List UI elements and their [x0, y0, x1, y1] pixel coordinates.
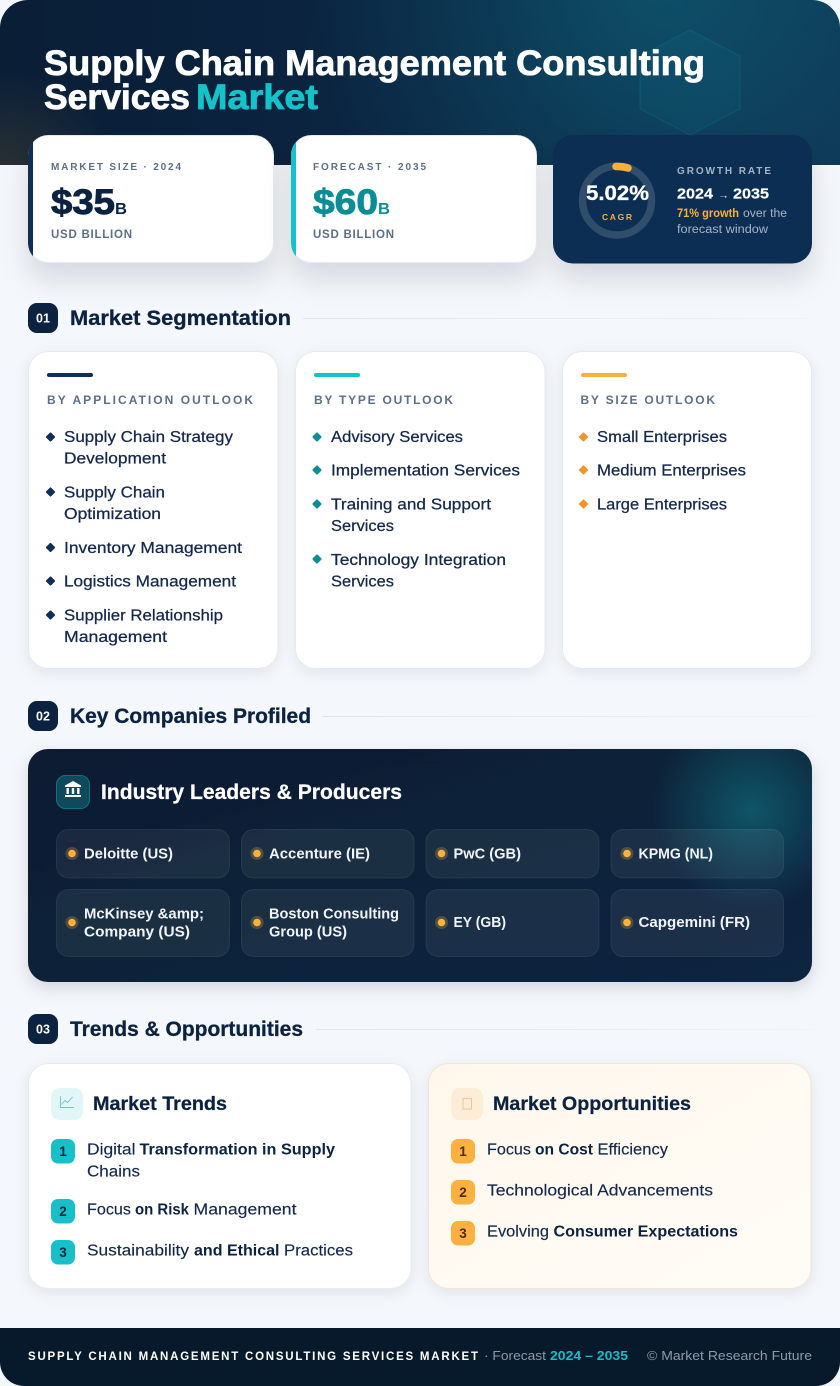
stat card: forecast 2035: FORECAST · 2035	[313, 162, 426, 173]
trend 1: Chains	[87, 1164, 140, 1180]
panel: by application outlook	[28, 352, 278, 668]
opportunity 3: Evolving	[487, 1224, 549, 1240]
icon: line chart	[51, 1088, 83, 1120]
year range	[677, 186, 769, 202]
stat card: market size 2024: MARKET SIZE · 2024	[51, 162, 181, 173]
donut gauge: CAGR	[602, 212, 632, 222]
footer: SUPPLY CHAIN MANAGEMENT CONSULTING SERVICES MARKET	[28, 1351, 478, 1363]
title: Supply Chain Management Consulting	[44, 44, 705, 83]
footer: · Forecast	[484, 1349, 547, 1363]
opportunity 1	[451, 1139, 668, 1164]
trend 1: 1	[59, 1144, 67, 1159]
panel: by size outlook: BY SIZE OUTLOOK	[580, 393, 715, 407]
size list: Small Enterprises	[597, 429, 727, 446]
application list: Optimization	[64, 506, 161, 523]
opportunity 1: Focus	[487, 1142, 531, 1158]
footer	[0, 1328, 840, 1386]
stat card: market size 2024: $35	[51, 183, 115, 222]
title: Services	[44, 78, 190, 117]
title: Market	[196, 78, 318, 117]
trend 2: Management	[194, 1202, 297, 1218]
trend 3	[51, 1240, 353, 1264]
trend 2: on Risk	[135, 1202, 189, 1218]
company chip: Boston Consulting: Group (US)	[269, 924, 347, 940]
company chip: Capgemini	[611, 890, 784, 956]
panel: by type outlook: BY TYPE OUTLOOK	[314, 393, 453, 407]
panel: market opportunities	[428, 1064, 811, 1288]
year range: 2035	[733, 186, 769, 202]
company chip: KPMG: KPMG (NL)	[638, 846, 713, 862]
company chip: Boston Consulting	[242, 890, 414, 956]
trend 2: 2	[59, 1204, 67, 1219]
trend 3: 3	[59, 1245, 67, 1260]
stat card: forecast 2035	[291, 135, 536, 263]
stat card: forecast 2035: B	[378, 201, 390, 218]
company chip: EY	[426, 890, 599, 956]
header banner	[0, 0, 840, 165]
company chip: McKinsey: Company (US)	[84, 924, 190, 940]
section heading 02	[28, 701, 812, 731]
stat card: growth rate: GROWTH RATE	[677, 166, 771, 177]
section heading 03: 03	[36, 1022, 50, 1036]
type list: Implementation Services	[331, 462, 520, 480]
section heading 03: Trends & Opportunities	[70, 1018, 303, 1041]
decorative hexagon	[640, 30, 740, 135]
section heading 02: 02	[36, 710, 50, 724]
opportunity 2: Technological Advancements	[487, 1182, 713, 1200]
stat card: growth rate: forecast window	[677, 224, 769, 236]
trend 3: Sustainability	[87, 1242, 189, 1260]
company chip: McKinsey: McKinsey &amp;	[84, 906, 204, 922]
company chip: Boston Consulting: Boston Consulting	[269, 906, 399, 922]
stat card: forecast 2035: $60	[313, 183, 378, 222]
application list: Supply Chain Strategy	[64, 429, 233, 446]
company chip: Deloitte: Deloitte (US)	[84, 846, 173, 862]
stat card: growth rate: over the	[743, 208, 787, 220]
trend 2	[51, 1199, 297, 1224]
opportunity 3: 3	[459, 1226, 467, 1241]
application list	[46, 429, 243, 646]
panel: by application outlook: BY APPLICATION OUTLOOK	[47, 393, 253, 407]
opportunity 1: 1	[459, 1144, 467, 1159]
company chip: Capgemini: Capgemini (FR)	[638, 915, 750, 931]
trend 1: Transformation in Supply	[140, 1142, 335, 1158]
type list: Services	[331, 518, 394, 535]
icon: missing glyph box	[451, 1088, 483, 1120]
footer: 2024 – 2035	[550, 1349, 628, 1363]
section heading 01: Market Segmentation	[70, 307, 291, 330]
size list: Medium Enterprises	[597, 462, 746, 480]
section heading 01	[28, 303, 812, 333]
application list: Management	[64, 629, 168, 646]
company chip: McKinsey	[56, 890, 230, 956]
type list: Training and Support	[331, 496, 492, 514]
panel: key companies	[28, 749, 812, 982]
section heading 01: 01	[36, 312, 50, 326]
section heading 02: Key Companies Profiled	[70, 705, 311, 728]
section heading 03	[28, 1014, 812, 1044]
company chip: Deloitte	[56, 830, 230, 878]
company chip: PwC: PwC (GB)	[454, 846, 521, 862]
application list: Development	[64, 450, 167, 468]
application list: Supply Chain	[64, 484, 165, 502]
stat card: forecast 2035: USD BILLION	[313, 229, 394, 241]
donut gauge	[582, 166, 652, 235]
application list: Logistics Management	[64, 574, 237, 590]
icon: bank building	[56, 776, 90, 808]
type list: Services	[331, 574, 394, 590]
application list: Supplier Relationship	[64, 608, 223, 624]
opportunity 2	[451, 1180, 713, 1204]
application list: Inventory Management	[64, 540, 243, 557]
trend 1	[51, 1139, 335, 1180]
panel: market opportunities: Market Opportunities	[493, 1093, 691, 1115]
stat card: growth rate: 71% growth	[677, 208, 739, 220]
type list	[312, 429, 520, 590]
panel: by size outlook	[562, 352, 812, 668]
size list: Large Enterprises	[597, 496, 727, 514]
company chip: Accenture: Accenture (IE)	[269, 846, 370, 862]
opportunity 3: Consumer Expectations	[554, 1224, 738, 1240]
panel heading: Industry Leaders & Producers	[101, 780, 402, 804]
trend 3: and Ethical	[194, 1242, 280, 1260]
panel: by type outlook	[296, 352, 545, 668]
trend 2: Focus	[87, 1202, 131, 1218]
type list: Advisory Services	[331, 429, 463, 446]
size list	[579, 429, 746, 514]
trend 1: Digital	[87, 1142, 136, 1158]
year range: →	[718, 190, 729, 202]
opportunity 1: Efficiency	[598, 1142, 668, 1158]
company chip: PwC	[426, 830, 599, 878]
donut gauge: 5.02%	[586, 182, 649, 205]
opportunity 3	[451, 1221, 738, 1246]
stat card: market size 2024	[28, 135, 274, 263]
stat card: growth rate	[553, 135, 812, 264]
type list: Technology Integration	[331, 552, 506, 569]
year range: 2024	[677, 186, 714, 202]
panel: market trends: Market Trends	[93, 1093, 227, 1115]
stat card: market size 2024: USD BILLION	[51, 229, 132, 241]
company chip: EY: EY (GB)	[454, 915, 506, 931]
stat card: market size 2024: B	[115, 201, 127, 218]
footer: © Market Research Future	[647, 1349, 812, 1363]
company chip: Accenture	[242, 830, 414, 878]
trend 3: Practices	[284, 1242, 353, 1260]
company chip: KPMG	[611, 830, 784, 878]
panel: market trends	[28, 1064, 411, 1288]
opportunity 1: on Cost	[535, 1142, 594, 1158]
title	[44, 44, 705, 117]
opportunity 2: 2	[459, 1185, 467, 1200]
